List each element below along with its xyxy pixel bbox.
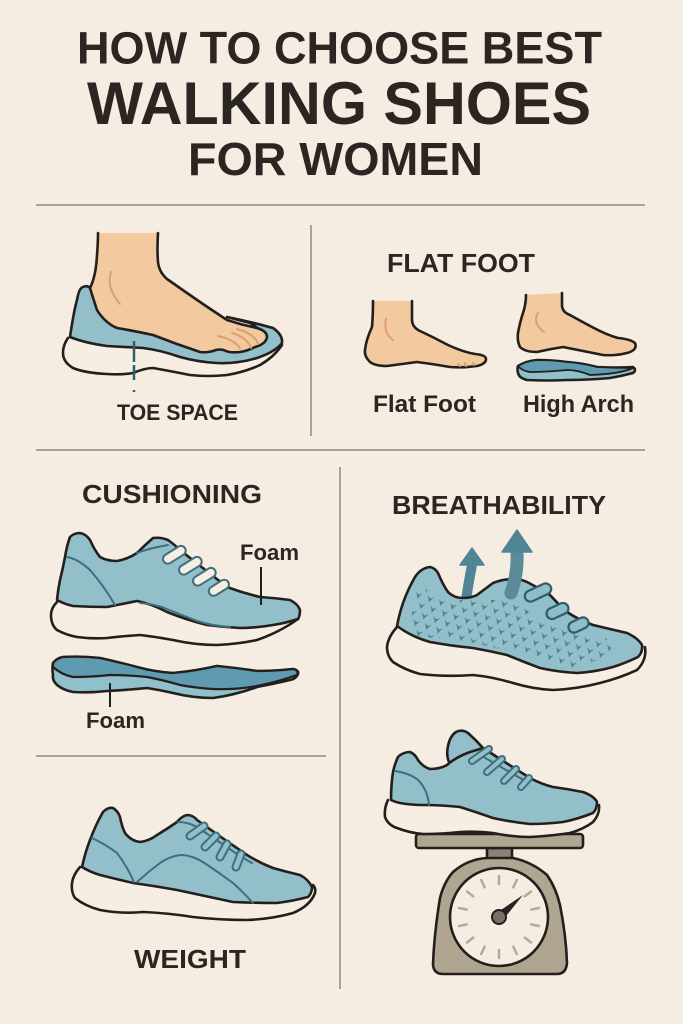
- panel: cushioning: [51, 479, 300, 733]
- heading: flat foot: FLAT FOOT: [387, 248, 535, 278]
- heading: breathability: BREATHABILITY: [392, 490, 606, 520]
- knit perforations: [411, 585, 612, 670]
- icon: foam insole: [52, 657, 298, 698]
- icon: sole of shoe with foot: [63, 233, 282, 376]
- dial needle and hub: [492, 895, 523, 924]
- scale dial: [450, 868, 548, 966]
- scale platform: [416, 834, 583, 848]
- arrow: large airflow: [502, 530, 532, 593]
- title: [77, 22, 602, 185]
- panel: weight: [72, 808, 315, 974]
- heading: cushioning: CUSHIONING: [82, 479, 262, 509]
- title: FOR WOMEN: [188, 133, 483, 185]
- icon: high arch foot: [518, 293, 636, 355]
- shoe laces: [161, 544, 231, 598]
- icon: shoe on scale: [385, 731, 599, 837]
- icon: flat foot: [365, 301, 486, 367]
- icon: cushioned shoe: [51, 533, 300, 645]
- callout: foam on insole: Foam: [86, 708, 145, 733]
- panel: toe space: [63, 233, 282, 425]
- icon: lightweight shoe: [72, 808, 315, 920]
- shoe laces: [523, 582, 590, 634]
- shoe laces: [472, 749, 529, 787]
- callout: foam on insole: [86, 683, 145, 733]
- shoe laces: [190, 826, 241, 867]
- callout: foam on shoe: Foam: [240, 540, 299, 565]
- icon: kitchen scale: [416, 834, 583, 974]
- icon: insole: [518, 360, 635, 380]
- label: flat foot: Flat Foot: [373, 391, 476, 418]
- toe space dashed marker: [133, 341, 135, 392]
- panel: flat foot: [365, 248, 636, 418]
- label: weight: WEIGHT: [134, 944, 246, 974]
- scale body: [433, 858, 567, 974]
- panel: scale: [385, 731, 599, 974]
- callout: foam on shoe: [240, 540, 299, 605]
- title: HOW TO CHOOSE BEST: [77, 22, 602, 74]
- scale stem: [487, 848, 512, 860]
- arrow: small airflow: [460, 548, 484, 600]
- icon: breathable shoe: [387, 567, 645, 690]
- title: WALKING SHOES: [87, 69, 591, 137]
- label: high arch: High Arch: [523, 391, 634, 418]
- dial ticks: [459, 876, 539, 958]
- panel: breathability: [387, 490, 645, 690]
- label: toe space: TOE SPACE: [117, 400, 238, 425]
